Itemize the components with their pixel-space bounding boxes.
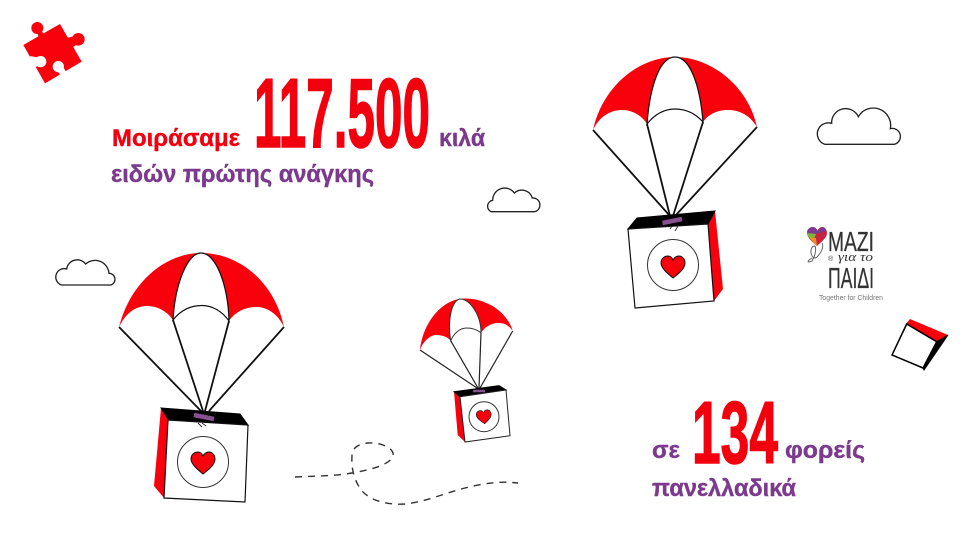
parachute: left with box: [119, 253, 284, 502]
cloud: top right: [817, 108, 900, 144]
text: πανελλαδικά: πανελλαδικά: [652, 475, 796, 502]
text: κιλά: κιλά: [439, 125, 485, 152]
parachute: top right with box: [593, 57, 757, 308]
text: σε: σε: [652, 437, 680, 464]
logo heart balloon: [807, 227, 827, 262]
stat: 134 organisations: [652, 383, 865, 502]
logo: Mazi gia to paidi: [807, 226, 883, 302]
suspension lines: [593, 122, 757, 216]
dashed flight path: [295, 443, 518, 504]
logo word: για το: για το: [838, 249, 874, 264]
text: ειδών πρώτης ανάγκης: ειδών πρώτης ανάγκης: [111, 161, 374, 188]
cloud: left: [56, 260, 115, 285]
big number: 134: 134: [692, 383, 778, 482]
big number: 117.500: 117.500: [254, 58, 430, 168]
suspension lines: [420, 331, 513, 388]
box: [454, 386, 510, 442]
text: φορείς: φορείς: [785, 437, 865, 464]
canopy: [593, 57, 757, 130]
canopy: [119, 253, 284, 327]
icon: falling cube: [892, 319, 948, 370]
cloud: middle: [488, 188, 540, 212]
headline: 117.500 kilos: [111, 58, 485, 188]
box: [154, 408, 248, 502]
logo tagline: Together for Children: [819, 293, 883, 302]
suspension lines: [119, 320, 284, 411]
registered mark: ®: [828, 255, 834, 263]
icon: red puzzle piece: [23, 22, 85, 83]
parachute: small centre with box: [420, 298, 513, 442]
canopy: [420, 298, 513, 350]
box: [628, 211, 723, 308]
logo word: ΠΑΙΔΙ: ΠΑΙΔΙ: [828, 263, 874, 295]
text: Μοιράσαμε: Μοιράσαμε: [112, 125, 240, 152]
logo word: MAZI: ΜΑΖΙ: [828, 226, 874, 257]
